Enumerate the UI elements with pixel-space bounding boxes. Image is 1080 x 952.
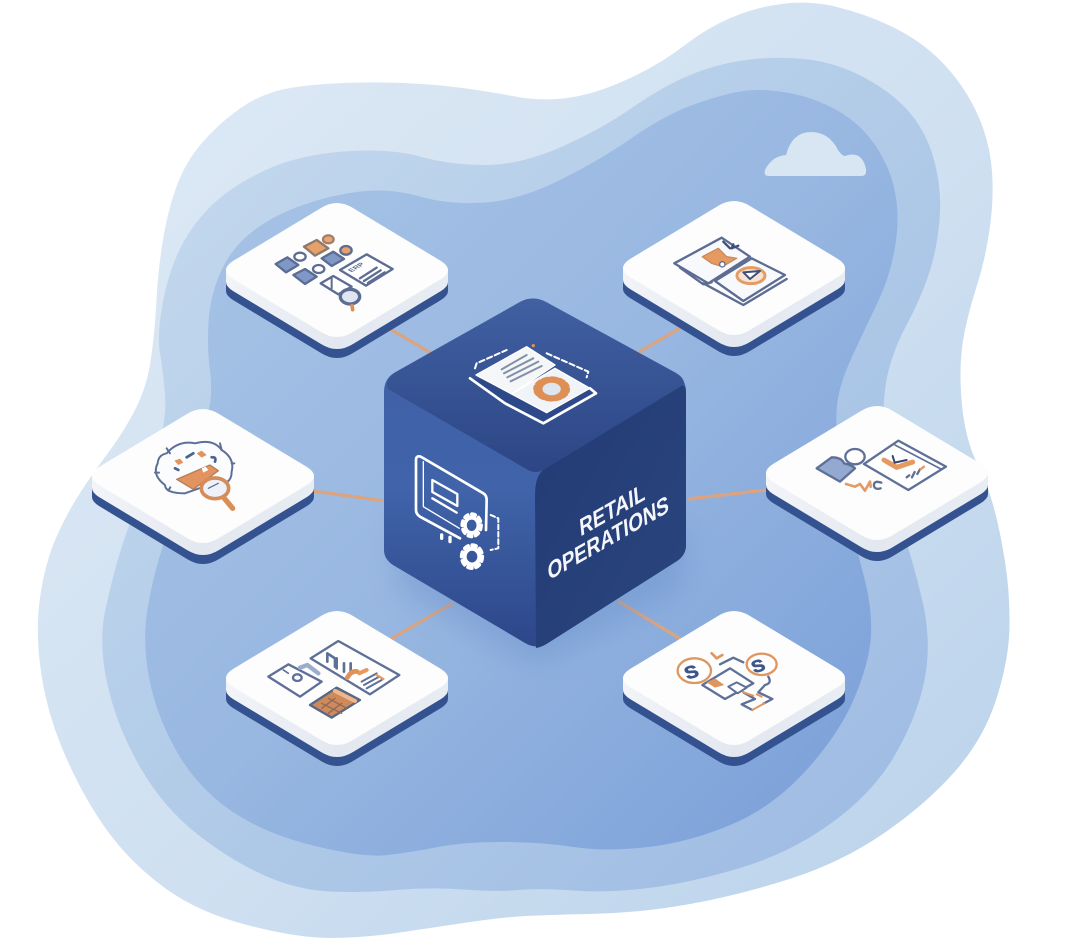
icon: dollar coins and flow — [678, 653, 777, 710]
cube right face — [535, 385, 686, 648]
card: right, person and dashboard — [766, 406, 988, 561]
card: top right, manual with truck and shield — [623, 201, 845, 356]
background blob: inner layer — [145, 90, 897, 856]
icon: dollar coins and flow: S — [748, 655, 768, 677]
connectors from cube to cards — [313, 327, 766, 640]
card: left, issue analysis — [92, 409, 314, 564]
cube top face — [387, 298, 684, 472]
card: top left, process mapping — [226, 203, 448, 358]
icon: wallet, report and calculator — [268, 641, 399, 718]
icon: org blocks, document and magnifier — [276, 235, 393, 310]
icon: open book with truck and shield — [674, 238, 787, 305]
background blob: middle layer — [102, 58, 940, 892]
label: ERP document text: ERP — [346, 261, 367, 273]
cube label: OPERATIONS — [546, 489, 670, 586]
cube label: RETAIL — [578, 477, 646, 542]
icon: dollar coins and flow: S — [682, 662, 702, 684]
card: bottom right, money flow — [623, 611, 845, 766]
cube left face — [384, 298, 686, 646]
card: bottom left, finance reports — [226, 611, 448, 766]
icon: person with screen — [817, 441, 946, 491]
cube shadow — [392, 520, 690, 665]
icon: open manual with orange gear — [470, 344, 596, 423]
icon: cloud with documents and magnifier — [155, 442, 234, 508]
icon: screen with white gears — [416, 456, 498, 568]
icon: cloud — [765, 132, 866, 176]
central cube — [384, 298, 686, 648]
